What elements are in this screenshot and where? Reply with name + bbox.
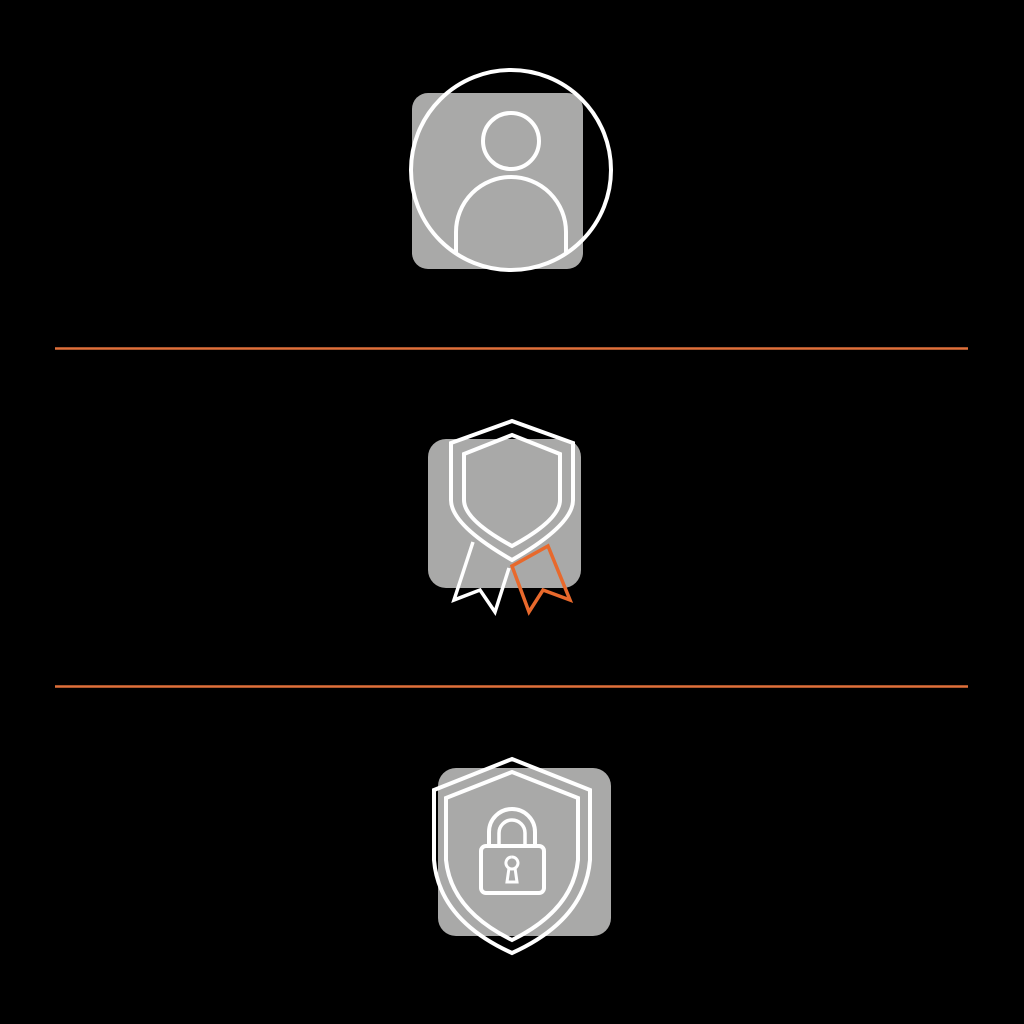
- icon: user profile: [411, 70, 611, 270]
- icon: security shield with lock: [434, 759, 611, 953]
- icon: award badge: [428, 421, 581, 612]
